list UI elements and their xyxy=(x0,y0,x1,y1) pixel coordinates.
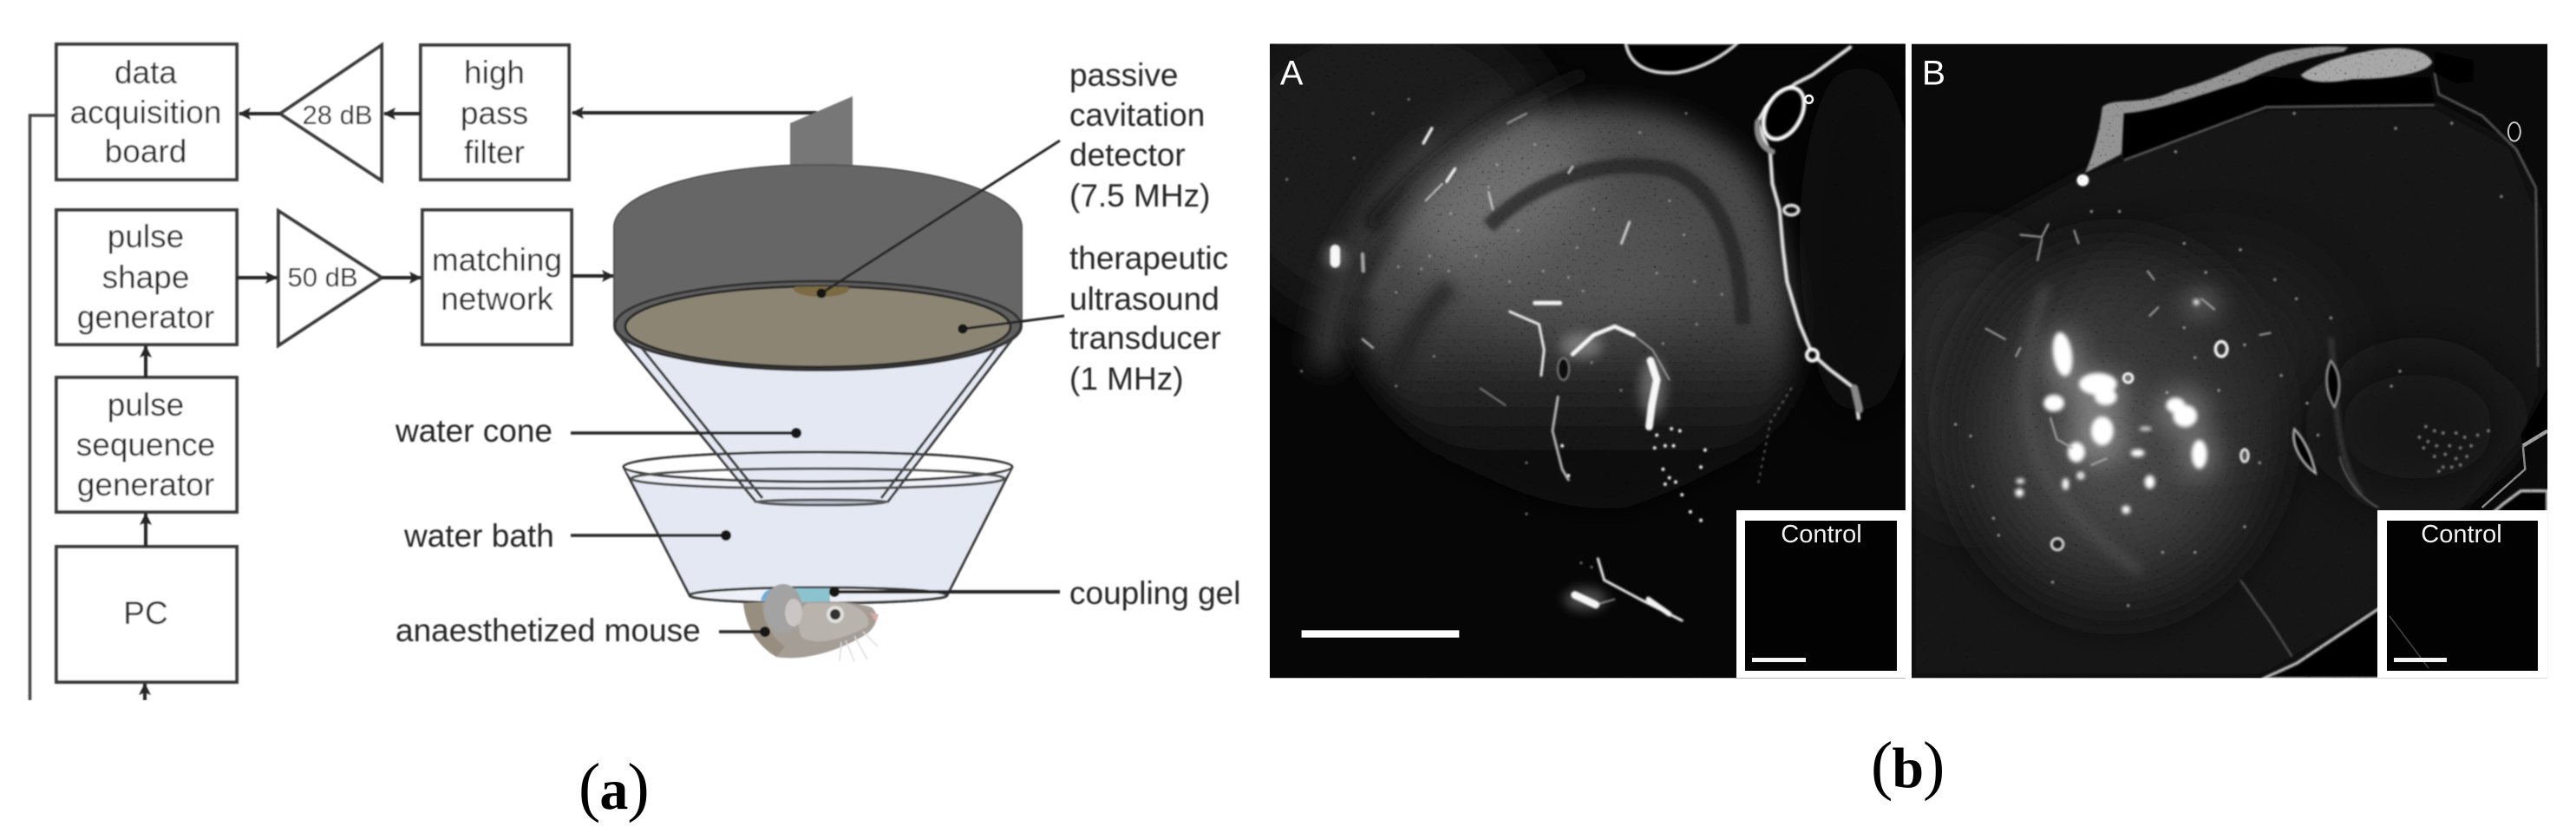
box: PC xyxy=(56,547,237,682)
box: pulse sequence generator: sequence xyxy=(76,427,215,463)
white separator between images xyxy=(1906,43,1912,511)
tissue texture xyxy=(1912,44,2547,678)
caption: (b): (b) xyxy=(1871,729,1945,802)
dark vessel holes xyxy=(1558,43,1818,380)
diagram labels: (1 MHz) xyxy=(1069,361,1184,397)
box: matching network: network xyxy=(441,281,553,317)
diagram labels: passive xyxy=(1069,57,1178,93)
icon: anaesthetized mouse xyxy=(743,584,879,661)
panel B: microscopy image xyxy=(1912,43,2548,679)
glow around central vessels xyxy=(1324,244,1665,610)
arrows: signal flow xyxy=(29,113,817,700)
diagram labels: (7.5 MHz) xyxy=(1069,178,1210,213)
box: pulse shape generator: shape xyxy=(102,259,189,295)
panel A: microscopy image xyxy=(1270,43,1906,679)
panel letter B: B xyxy=(1922,53,1945,92)
box: pulse shape generator xyxy=(56,210,237,345)
caption: (a): (a) xyxy=(579,751,650,824)
tissue glow xyxy=(1211,4,1918,509)
speckle cells xyxy=(1287,99,1722,568)
amplifier: 50 dB xyxy=(278,211,382,345)
punctate cells xyxy=(1562,429,1705,521)
tissue texture xyxy=(1270,44,1906,678)
panel letter A: A xyxy=(1280,54,1304,92)
dot cluster xyxy=(2419,427,2488,471)
scale bar xyxy=(1302,630,1459,638)
signal chain block diagram xyxy=(56,44,572,682)
white cut below diagram xyxy=(0,700,520,735)
inset: control A: Control xyxy=(1781,521,1862,548)
diagram labels: water cone xyxy=(395,413,552,449)
thin vessels xyxy=(1985,224,2271,465)
passive cavitation detector housing xyxy=(790,96,853,167)
bright clusters xyxy=(2015,299,2207,514)
bright vessels xyxy=(1335,48,1860,620)
box: high pass filter: pass xyxy=(461,95,528,131)
box: pulse shape generator: pulse xyxy=(108,219,184,254)
water bath rim and water level lines xyxy=(624,452,1012,489)
box: matching network: matching xyxy=(432,242,562,278)
box: matching network xyxy=(422,210,572,345)
black corner regions xyxy=(2240,388,2547,679)
box: data acquisition board: board xyxy=(105,134,186,169)
ring vessels and dark vessels xyxy=(2051,341,2339,550)
diagram labels: coupling gel xyxy=(1069,575,1240,611)
box: PC: PC xyxy=(123,595,168,631)
box: high pass filter: high xyxy=(464,55,525,90)
box: pulse sequence generator: generator xyxy=(77,467,214,502)
leader lines with end dots xyxy=(571,141,1064,637)
amplifier: 28 dB xyxy=(280,45,382,180)
inset: control B xyxy=(2377,510,2547,678)
diagram labels xyxy=(395,57,1240,648)
inset: control B: Control xyxy=(2421,521,2502,548)
diagram labels: therapeutic xyxy=(1069,240,1228,276)
diagram labels: water bath xyxy=(403,518,554,554)
water cone xyxy=(617,332,1017,505)
box: data acquisition board: acquisition xyxy=(70,95,221,130)
box: high pass filter xyxy=(421,45,569,180)
speckle dots xyxy=(1956,114,2501,606)
diagram labels: ultrasound xyxy=(1069,281,1219,317)
diagram labels: anaesthetized mouse xyxy=(396,613,701,648)
amplifier: 28 dB: 28 dB xyxy=(302,100,373,130)
therapeutic ultrasound transducer xyxy=(614,165,1022,371)
box: pulse shape generator: generator xyxy=(77,299,214,335)
black gap and upper tissue xyxy=(2076,47,2538,367)
box: data acquisition board xyxy=(56,44,237,180)
box: pulse sequence generator: pulse xyxy=(108,387,184,423)
inset: control A xyxy=(1736,510,1906,678)
diagram labels: transducer xyxy=(1069,320,1221,356)
box: pulse sequence generator xyxy=(56,377,237,512)
amplifier: 50 dB: 50 dB xyxy=(287,262,358,292)
water bath body xyxy=(624,452,1012,603)
diagram labels: cavitation xyxy=(1069,97,1205,133)
panel: experimental setup diagram xyxy=(29,44,1240,700)
box: high pass filter: filter xyxy=(464,135,525,170)
glow around bright clusters xyxy=(2046,290,2219,478)
box: data acquisition board: data xyxy=(114,55,177,90)
tissue glow xyxy=(1886,105,2542,678)
diagram labels: detector xyxy=(1069,137,1186,173)
